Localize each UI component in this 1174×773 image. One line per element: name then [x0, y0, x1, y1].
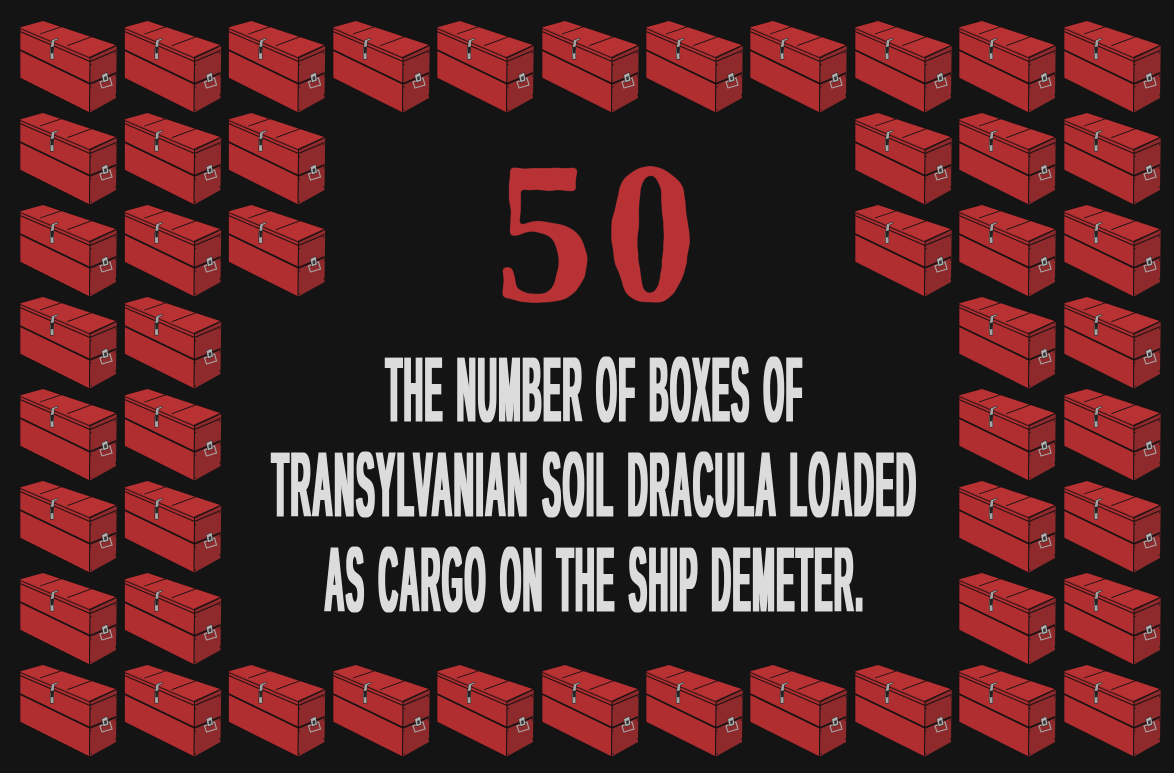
description text: [272, 338, 918, 632]
big number 50: 0: [606, 122, 695, 346]
toolbox row 4: [20, 297, 1161, 389]
toolbox row 6: [20, 481, 1161, 573]
big number 50: [495, 121, 695, 346]
toolbox row 3: [20, 205, 1161, 297]
toolbox row 8: [20, 665, 1161, 757]
toolbox row 2: [20, 113, 1161, 205]
toolbox row 7: [20, 573, 1161, 665]
big number 50: 5: [495, 121, 594, 345]
toolbox row 1: [20, 21, 1161, 113]
toolbox row 5: [20, 389, 1161, 481]
